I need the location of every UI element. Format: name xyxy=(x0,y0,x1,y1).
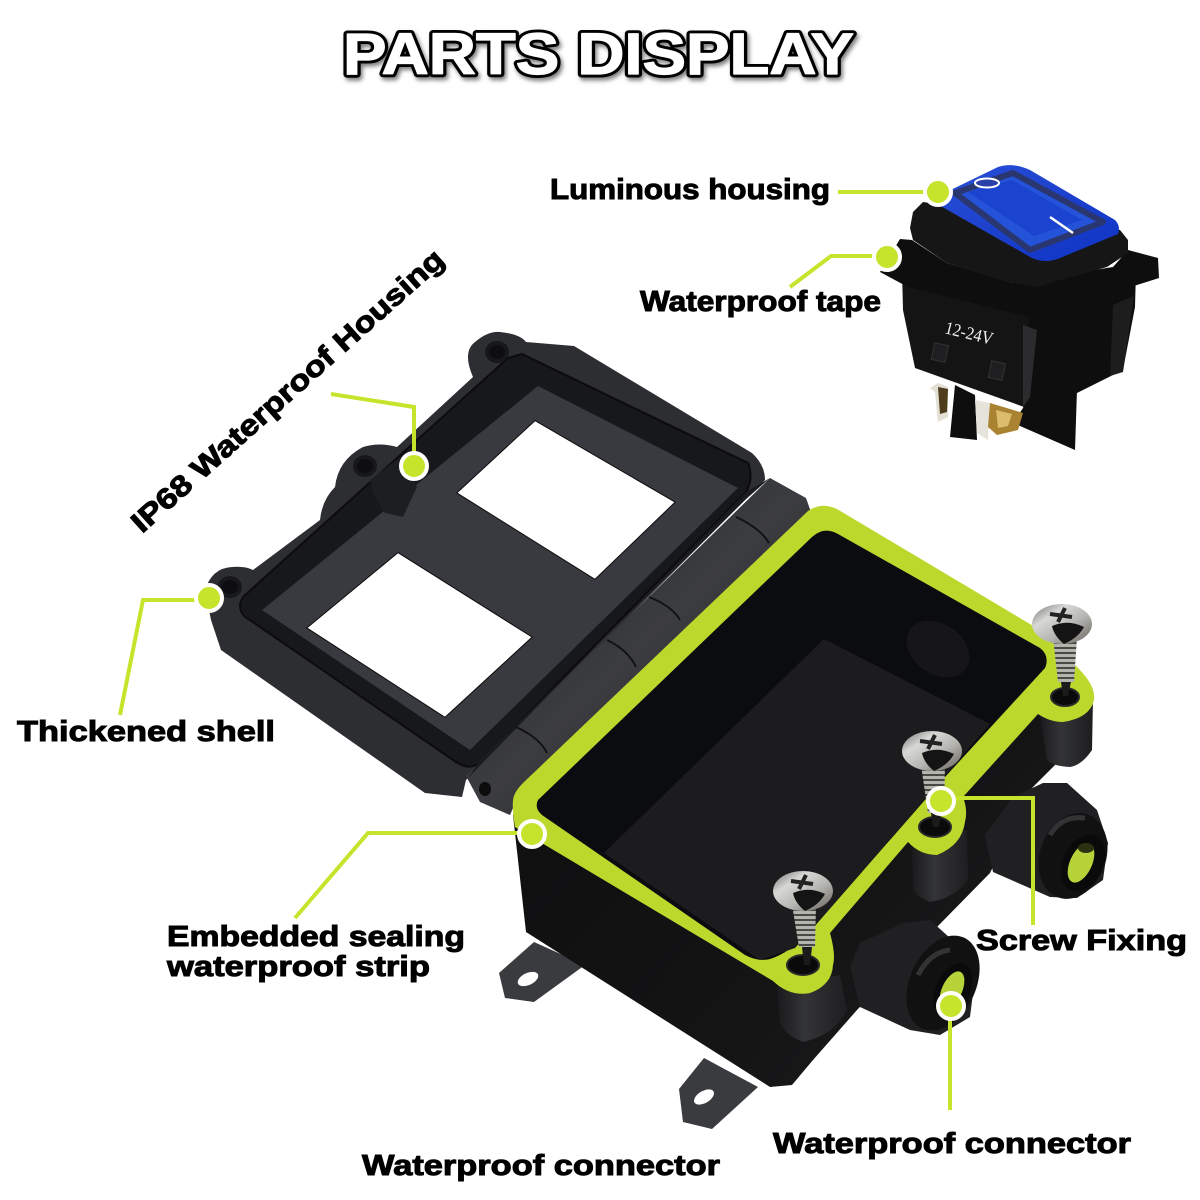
callout: screw fixing: Screw Fixing xyxy=(976,925,1187,957)
callout: screw fixing xyxy=(928,788,1187,957)
hinge xyxy=(466,478,812,815)
lid floor xyxy=(262,386,738,750)
box body xyxy=(513,515,1060,1087)
callout: thickened shell: Thickened shell xyxy=(17,716,275,748)
screw middle xyxy=(902,731,962,827)
panel: junction box body xyxy=(499,506,1119,1129)
lid screw ears xyxy=(220,343,507,596)
switch terminals xyxy=(930,383,1023,440)
callout: waterproof connector right xyxy=(773,993,1131,1160)
connector gland rear xyxy=(985,783,1119,909)
switch rear mounting plate xyxy=(950,385,1077,450)
corner posts xyxy=(777,698,1093,1042)
waterproof rubber boot xyxy=(910,202,1128,287)
callout: embedded sealing strip xyxy=(166,821,545,983)
sealing strip rim xyxy=(513,506,1094,994)
callout: embedded sealing strip: Embedded sealing xyxy=(167,921,465,953)
mounting tab left xyxy=(499,942,585,1002)
screw front xyxy=(773,871,833,965)
lid shell xyxy=(205,332,765,797)
connector gland front xyxy=(850,920,994,1042)
screw rear xyxy=(1032,604,1092,696)
lid recess xyxy=(240,354,751,767)
callout: waterproof tape xyxy=(640,244,900,318)
voltage marking: 12-24V xyxy=(943,317,995,349)
luminous blue cap xyxy=(930,165,1119,261)
callout: luminous housing xyxy=(550,174,951,206)
panel: lid of waterproof housing xyxy=(205,332,812,815)
switch body xyxy=(902,270,1136,410)
title: PARTS DISPLAY xyxy=(343,22,854,87)
box cavity xyxy=(537,531,1047,960)
lid rib xyxy=(370,457,417,517)
screw holes xyxy=(787,688,1079,975)
callout: waterproof tape: Waterproof tape xyxy=(640,286,881,318)
callout: waterproof connector right: Waterproof connector xyxy=(773,1128,1131,1160)
mounting tab bottom xyxy=(679,1058,758,1129)
title: PARTS DISPLAY xyxy=(343,22,854,87)
callout: embedded sealing strip: waterproof strip xyxy=(166,951,430,983)
rocker switch xyxy=(880,165,1159,450)
callout: luminous housing: Luminous housing xyxy=(550,174,830,206)
callout: IP68 waterproof housing: IP68 Waterproof Housing xyxy=(125,243,451,539)
callout: thickened shell xyxy=(17,585,275,748)
switch flange xyxy=(880,239,1159,318)
label: waterproof connector bottom: Waterproof connector xyxy=(362,1150,720,1182)
